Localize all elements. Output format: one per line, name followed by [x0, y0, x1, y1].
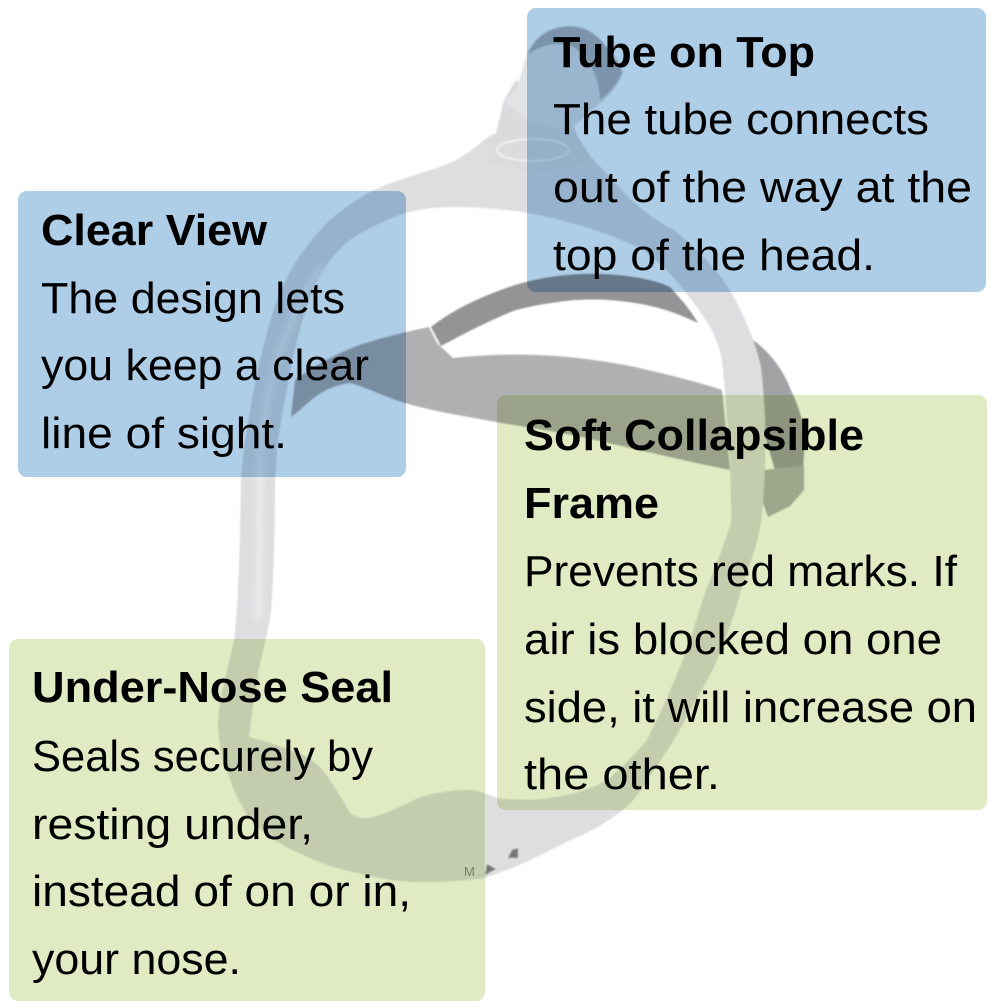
- text: tube description: The tube connects: [553, 95, 929, 144]
- text: tube description: [553, 95, 972, 280]
- text: seal description: your nose.: [32, 935, 241, 984]
- heading: soft collapsible frame: [524, 411, 864, 528]
- text: tube description: out of the way at the: [553, 163, 972, 212]
- heading: soft collapsible frame: Frame: [524, 479, 659, 528]
- mask illustration: [218, 26, 805, 882]
- text: frame description: the other.: [524, 750, 720, 799]
- text: seal description: [32, 732, 411, 984]
- icon: strap buckle: [762, 466, 804, 517]
- icon: right headgear strap: [753, 340, 805, 470]
- heading: soft collapsible frame: Soft Collapsible: [524, 411, 864, 460]
- panel: tube on top: [527, 8, 986, 292]
- icon: frame: [218, 137, 765, 882]
- icon: hub ring: [497, 139, 569, 161]
- text: clear view description: line of sight.: [41, 409, 287, 458]
- icon: size marks: [485, 848, 518, 875]
- icon: frame highlight: [258, 265, 322, 620]
- text: tube description: top of the head.: [553, 231, 875, 280]
- heading: tube on top: Tube on Top: [553, 28, 815, 77]
- icon: connector hub: [488, 80, 591, 171]
- icon: upper headgear strap: [431, 274, 698, 346]
- text: seal description: instead of on or in,: [32, 867, 411, 916]
- heading: under-nose seal: Under-Nose Seal: [32, 663, 393, 712]
- text: frame description: air is blocked on one: [524, 615, 942, 664]
- icon: lower headgear strap: [291, 327, 730, 470]
- panel: soft collapsible frame: [497, 395, 987, 810]
- text: frame description: side, it will increase on: [524, 683, 977, 732]
- panel: under-nose seal: [9, 639, 485, 1001]
- text: clear view description: The design lets: [41, 274, 345, 323]
- text: seal description: resting under,: [32, 800, 313, 849]
- icon: size letter: M: [464, 864, 475, 879]
- text: frame description: [524, 547, 977, 799]
- panel: clear view: [18, 191, 406, 477]
- text: clear view description: [41, 274, 369, 458]
- heading: clear view: Clear View: [41, 206, 268, 255]
- icon: tube swivel: [504, 26, 623, 130]
- text: frame description: Prevents red marks. If: [524, 547, 958, 596]
- text: seal description: Seals securely by: [32, 732, 373, 781]
- icon: swivel rim: [527, 27, 622, 100]
- text: clear view description: you keep a clear: [41, 341, 369, 390]
